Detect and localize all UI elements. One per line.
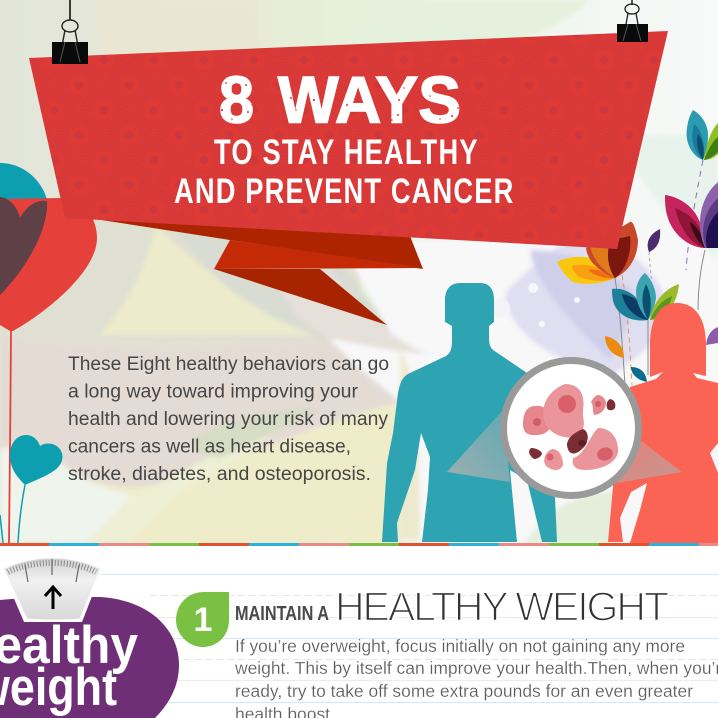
title: 8 ways: 8: [219, 62, 254, 136]
red heart balloon: [0, 198, 97, 331]
notebook lines: [100, 574, 718, 702]
title banner: [29, 31, 668, 249]
small dark cell: [529, 448, 542, 459]
heart overlap: [0, 197, 47, 295]
icon: scale arrow: [45, 587, 61, 609]
coloured divider stripe: [0, 543, 718, 546]
flower: yellow and red: [557, 222, 638, 284]
intro paragraph: These Eight healthy behaviors can go: [68, 354, 389, 375]
balloon hearts on the left: [0, 163, 97, 543]
title distress specks: [221, 82, 459, 121]
body paragraph: [234, 636, 718, 718]
title: and prevent cancer: AND PREVENT CANCER: [174, 172, 514, 211]
hero background with soft translucent shapes: [0, 0, 718, 543]
intro paragraph: stroke, diabetes, and osteoporosis.: [68, 464, 371, 485]
banner ribbon tails: [95, 219, 423, 325]
flower: teal, blue and green: [612, 273, 679, 320]
title: to stay healthy: TO STAY HEALTHY: [214, 133, 478, 172]
dark cell: [567, 429, 588, 454]
flower: crimson and purple: [665, 182, 718, 248]
small teal heart balloon: [10, 435, 62, 485]
intro paragraph: a long way toward improving your: [68, 382, 359, 402]
banner panel: [29, 31, 668, 249]
heading: MAINTAIN A: [235, 603, 329, 625]
intro paragraph: [68, 354, 389, 485]
flowers on the right: [557, 110, 718, 385]
green number badge: 1: [194, 601, 212, 639]
ribbon dark fold: [95, 219, 423, 269]
flower: purple petal: [706, 327, 718, 345]
ribbon tail: [214, 269, 387, 325]
top right cell: [591, 395, 606, 415]
top right dark cell: [607, 399, 615, 410]
red balloon string: [9, 331, 11, 543]
magnifier beam towards man: [447, 410, 510, 482]
healthy weight label: [0, 616, 138, 717]
teal heart balloon: [0, 163, 48, 300]
binder clip left: [52, 0, 88, 64]
woman silhouette: [608, 303, 718, 543]
heading: HEALTHY WEIGHT: [335, 584, 669, 630]
section one panel: [0, 546, 718, 718]
man silhouette: [382, 283, 557, 542]
left cell: [523, 406, 552, 435]
magnifier ring: [504, 360, 638, 496]
flower: teal and green: [687, 110, 718, 160]
lower right cell: [573, 428, 618, 470]
body paragraph: If you’re overweight, focus initially on not gaining any more: [235, 636, 685, 656]
magnifier beam towards woman: [617, 440, 682, 483]
flower: small teal bud: [631, 367, 647, 382]
purple blob: [0, 597, 179, 718]
binder clip right: [617, 0, 648, 42]
flower: small orange bud: [605, 336, 624, 358]
ribbon mid fold: [214, 240, 423, 269]
green number badge: [176, 592, 229, 647]
flower stems: [615, 160, 705, 385]
magnifier circle with cancer cells: [504, 360, 638, 496]
icon: bathroom scale dial: [1, 556, 103, 622]
body paragraph: weight. This by itself can improve your health.Then, when you’re: [234, 658, 718, 678]
intro paragraph: cancers as well as heart disease,: [68, 436, 351, 458]
intro paragraph: health and lowering your risk of many: [68, 409, 389, 430]
body paragraph: ready, try to take off some extra pounds for an even greater: [235, 681, 693, 701]
teal balloon strings: [0, 485, 25, 543]
small lower cell: [544, 449, 563, 470]
flower: small purple bud: [648, 229, 660, 252]
title: 8 ways: WAYS: [278, 62, 461, 136]
big cell: [543, 384, 584, 438]
